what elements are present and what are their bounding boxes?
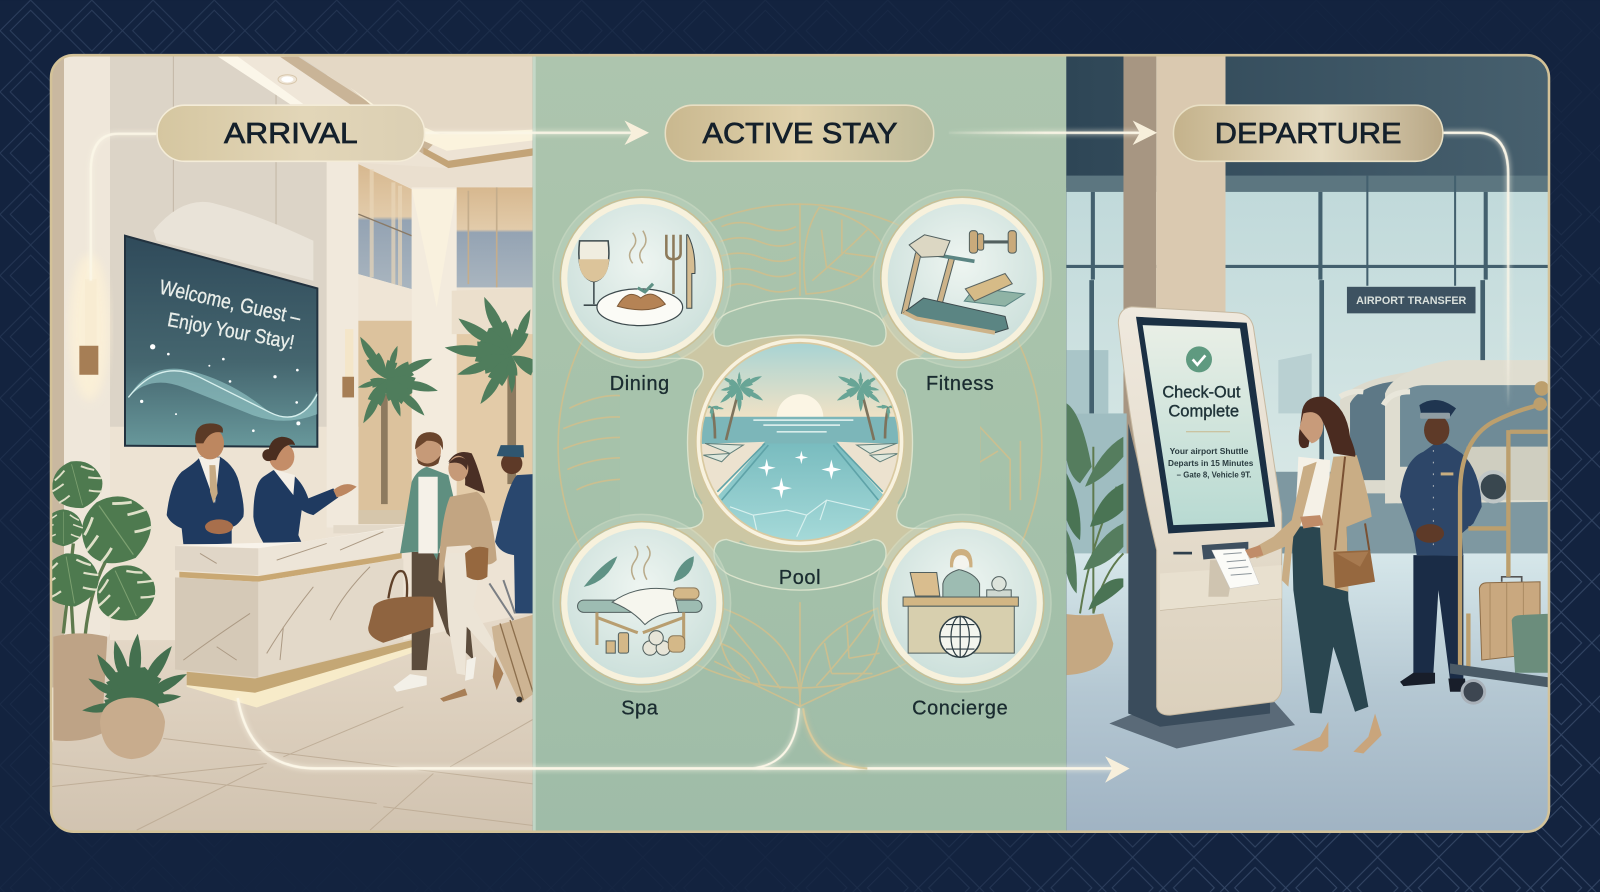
heading pill: active stay: ACTIVE STAY bbox=[703, 118, 897, 150]
lobby architecture upper bbox=[52, 56, 533, 743]
flow line: active stay to departure bbox=[949, 131, 1141, 134]
heading pill: departure: DEPARTURE bbox=[1215, 118, 1402, 150]
guest woman bbox=[438, 452, 503, 702]
reception desk bbox=[175, 525, 420, 707]
guest man bbox=[393, 432, 476, 692]
shuttle details: Departs in 15 Minutes bbox=[1168, 458, 1254, 468]
airport shuttle bus bbox=[1340, 360, 1557, 503]
shuttle details bbox=[1168, 446, 1254, 479]
kiosk screen bbox=[1136, 317, 1275, 533]
bellman behind guests bbox=[495, 445, 532, 614]
palm trees bbox=[354, 293, 559, 504]
check-out kiosk bbox=[1109, 307, 1295, 748]
concierge icon circle bbox=[873, 514, 1051, 692]
woven planter, large bbox=[53, 633, 107, 741]
bellman bbox=[1400, 400, 1482, 692]
flow line: arrival loop left bbox=[91, 134, 156, 281]
panel: departure terminal scene bbox=[1066, 55, 1557, 833]
duffel bag bbox=[368, 571, 433, 643]
monstera plant bbox=[52, 461, 156, 634]
label: dining: Dining bbox=[610, 373, 670, 395]
panel: active stay amenities bbox=[533, 55, 1066, 832]
shuttle details: – Gate 8, Vehicle 9T. bbox=[1177, 469, 1251, 479]
luggage cart bbox=[1450, 381, 1557, 703]
small palm plant bbox=[82, 634, 187, 713]
suitcase bbox=[1479, 582, 1540, 660]
label: spa: Spa bbox=[621, 697, 659, 719]
arrowhead: bottom flow bbox=[1105, 756, 1130, 783]
kiosk base bbox=[1109, 423, 1295, 748]
arrowhead: to departure bbox=[1133, 120, 1157, 145]
label: pool: Pool bbox=[779, 567, 821, 589]
woven planter bbox=[1067, 613, 1113, 675]
floor bbox=[1067, 553, 1557, 833]
sign: airport transfer: AIRPORT TRANSFER bbox=[1356, 295, 1466, 307]
kiosk housing bbox=[1118, 307, 1282, 715]
heading pill: arrival: ARRIVAL bbox=[224, 118, 358, 150]
dining icon circle bbox=[553, 190, 731, 367]
reception scene bbox=[38, 423, 543, 759]
window mullions upper bbox=[1066, 176, 1549, 286]
staff member: man bbox=[167, 423, 244, 544]
gold connector band and pockets bbox=[620, 279, 980, 603]
textured wall bbox=[110, 54, 327, 437]
rolling suitcase bbox=[488, 580, 532, 704]
flow line: spa curve bbox=[750, 708, 799, 768]
arrowhead: to active stay bbox=[624, 120, 649, 145]
distant skyline and road bbox=[1067, 280, 1557, 560]
panel: arrival lobby scene bbox=[52, 56, 533, 830]
pillars and windows bbox=[340, 162, 358, 164]
structural column bbox=[1123, 55, 1226, 708]
amenity labels bbox=[610, 373, 1008, 719]
flow line: bottom return bbox=[238, 698, 1114, 768]
shuttle details: Your airport Shuttle bbox=[1170, 446, 1249, 456]
label: fitness: Fitness bbox=[926, 373, 994, 395]
wall sconces bbox=[69, 254, 354, 401]
welcome display screen: Welcome, Guest – bbox=[157, 276, 303, 330]
flow line: arrival to active stay bbox=[424, 131, 633, 134]
receipt slot and receipt bbox=[1173, 542, 1259, 597]
woven planter, small bbox=[100, 697, 165, 759]
welcome display screen bbox=[125, 236, 317, 447]
sign: airport transfer bbox=[1347, 287, 1476, 313]
heading pill: arrival bbox=[157, 105, 424, 161]
glowing journey flow lines bbox=[91, 133, 1508, 768]
green bag bbox=[1512, 613, 1557, 673]
heading pill: active stay bbox=[665, 105, 934, 161]
lobby floor bbox=[50, 427, 543, 853]
decorative gold line art bbox=[558, 203, 1042, 706]
heading pill: departure bbox=[1173, 105, 1443, 161]
kiosk screen: Complete bbox=[1168, 401, 1239, 420]
flow line: departure loop right bbox=[1443, 133, 1508, 408]
spa icon circle bbox=[553, 514, 731, 692]
pool center circle bbox=[693, 338, 907, 550]
fitness icon circle bbox=[873, 190, 1051, 367]
staff member: woman gesturing bbox=[253, 437, 357, 543]
kiosk, people and cart scene bbox=[1067, 280, 1557, 833]
green check badge bbox=[1186, 346, 1212, 372]
ceiling bbox=[326, 56, 532, 132]
potted plant bbox=[1067, 403, 1123, 613]
headline: Check-Out bbox=[1162, 382, 1241, 401]
guest checking out bbox=[1245, 397, 1382, 753]
flow line: concierge curve bbox=[803, 708, 867, 768]
label: concierge: Concierge bbox=[912, 697, 1008, 719]
welcome display screen: Enjoy Your Stay! bbox=[166, 309, 296, 354]
